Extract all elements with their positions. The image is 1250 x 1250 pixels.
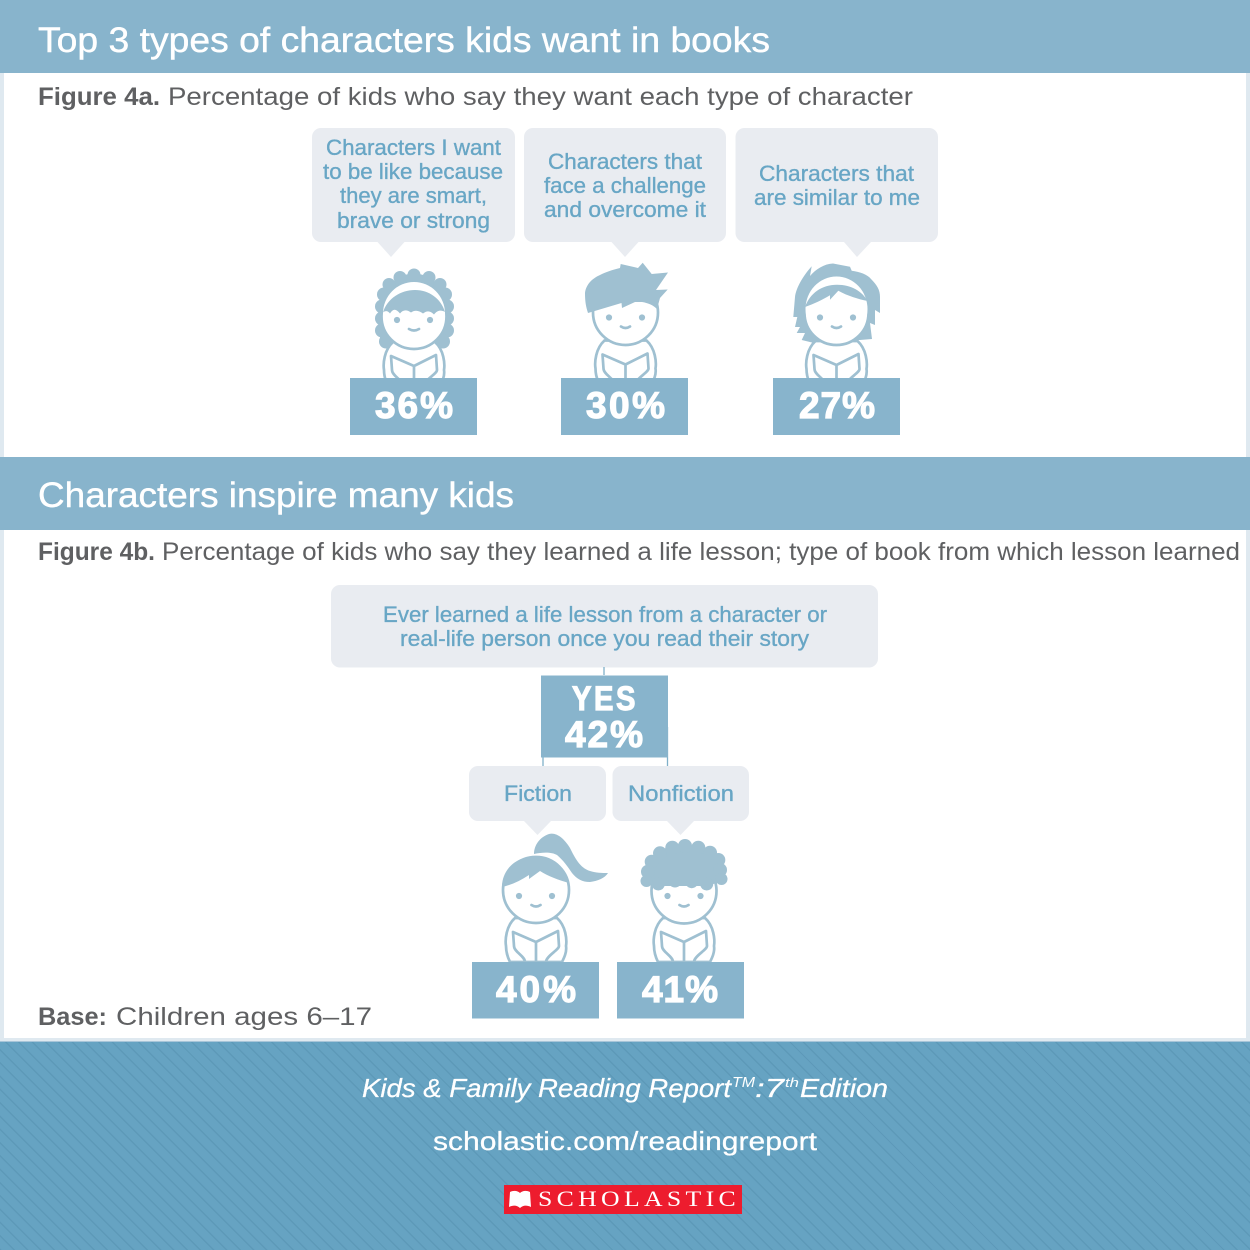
speech bubble: fiction: Fiction (504, 781, 572, 806)
stat box: fiction 40% (472, 962, 599, 1018)
figure 4a caption: Figure 4a. (38, 83, 160, 111)
base note: Children ages 6–17 (116, 1003, 372, 1031)
icon: curly haired girl reading (375, 268, 454, 386)
speech bubble: fiction (469, 766, 606, 835)
stat box: nonfiction 41% (617, 962, 744, 1018)
speech bubble: life lesson question (331, 585, 878, 668)
speech bubble: similar to me: are similar to me (754, 185, 920, 210)
speech bubble: nonfiction: Nonfiction (628, 781, 734, 806)
base note (38, 1003, 372, 1031)
scholastic logo (504, 1185, 742, 1214)
speech bubble: face a challenge (524, 128, 726, 257)
footer: report title: Edition (800, 1073, 888, 1103)
footer: report title (362, 1073, 888, 1103)
footer: report title: TM (732, 1074, 756, 1091)
stat box: fiction 40%: 40% (496, 969, 576, 1010)
stat box: yes 42%: YES (572, 680, 638, 718)
speech bubble: life lesson question: real-life person once you read their story (400, 626, 809, 651)
speech bubble: similar to me: Characters that (759, 161, 914, 186)
stat box: nonfiction 41%: 41% (642, 969, 718, 1010)
stat box: 36%: 36% (375, 385, 453, 426)
footer: url: scholastic.com/readingreport (433, 1126, 818, 1156)
stat box: 36% (350, 378, 477, 435)
icon: spiky haired boy reading (585, 263, 668, 384)
speech bubble: want to be like: to be like because (323, 159, 503, 184)
icon: open book (509, 1191, 531, 1208)
footer: report title: :7 (755, 1073, 786, 1103)
stat box: 30%: 30% (586, 385, 665, 426)
speech bubble: want to be like: Characters I want (326, 135, 501, 160)
speech bubble: similar to me (736, 128, 938, 257)
scholastic logo: SCHOLASTIC (538, 1186, 740, 1211)
figure 4b caption: Percentage of kids who say they learned a life lesson; type of book from which lesson learned (162, 538, 1240, 566)
speech bubble: want to be like: they are smart, (340, 183, 487, 208)
speech bubble: want to be like (312, 128, 515, 257)
speech bubble: nonfiction (612, 766, 749, 835)
icon: headband girl reading (793, 264, 880, 385)
figure 4b caption: Figure 4b. (38, 538, 155, 566)
header band: characters inspire (0, 457, 1250, 530)
figure 4a caption: Percentage of kids who say they want each type of character (168, 83, 913, 111)
speech bubble: face a challenge: face a challenge (544, 173, 706, 198)
header band: top 3 types (0, 0, 1250, 73)
heading: characters inspire many kids: Characters inspire many kids (38, 476, 514, 515)
speech bubble: want to be like: brave or strong (337, 208, 490, 233)
speech bubble: face a challenge: Characters that (548, 149, 702, 174)
heading: top 3 types of characters: Top 3 types of characters kids want in books (38, 21, 770, 60)
icon: ponytail girl reading (502, 834, 608, 962)
stat box: yes 42%: 42% (565, 714, 643, 755)
speech bubble: face a challenge: and overcome it (544, 197, 706, 222)
icon: curly haired boy reading (640, 839, 728, 962)
footer: report title: Kids & Family Reading Report (362, 1073, 733, 1103)
stat box: 30% (561, 378, 688, 435)
footer: report title: th (785, 1075, 799, 1090)
stat box: 27%: 27% (799, 385, 875, 426)
base note: Base: (38, 1003, 107, 1031)
speech bubble: life lesson question: Ever learned a life lesson from a character or (383, 602, 827, 627)
tree connectors (543, 667, 668, 766)
stat box: 27% (773, 378, 900, 435)
stat box: yes 42% (541, 676, 668, 758)
